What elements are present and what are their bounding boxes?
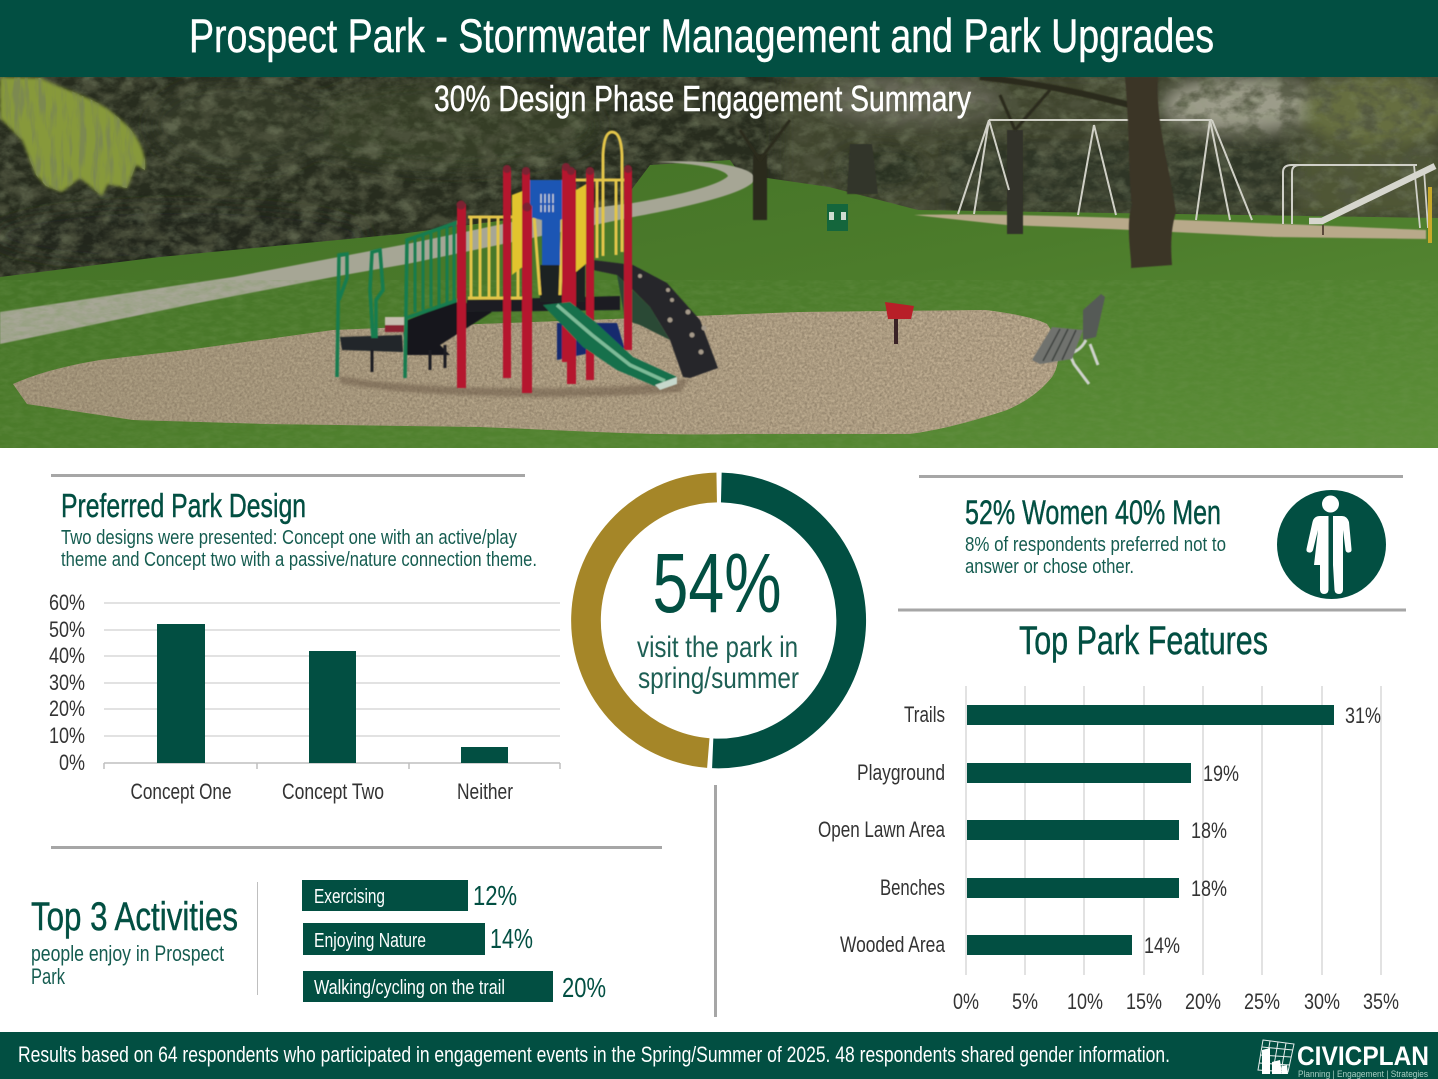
bar chart: park features: Benches (880, 875, 945, 900)
bar chart: park features: 30% (1304, 989, 1340, 1014)
subtitle: 30% Design Phase Engagement Summary (434, 78, 971, 119)
bar chart: park features: Open Lawn Area (818, 817, 946, 842)
icon: play structure (337, 132, 718, 393)
bar chart: park features: 10% (1067, 989, 1103, 1014)
panel: gender split (965, 490, 1386, 599)
footer note: Results based on 64 respondents who participated in engagement events in the Spring/Summer of 2025. 48 respondents shared gender information. (18, 1042, 1170, 1067)
icon: gender inclusive person (1277, 490, 1386, 599)
panel: preferred park design (49, 487, 560, 804)
bar: walking and cycling: Walking/cycling on the trail (314, 977, 505, 999)
bar: exercising (302, 880, 517, 911)
bar chart: preferred design: 60% (49, 590, 85, 615)
bar chart: preferred design: Concept One (130, 779, 232, 804)
bar chart: preferred design: Neither (457, 779, 513, 804)
panel: top 3 activities (31, 880, 606, 1003)
bar: exercising: 12% (473, 880, 517, 911)
text: activities note: Park (31, 964, 66, 989)
bar chart: preferred design: 0% (59, 750, 85, 775)
donut chart: 54% visit in spring/summer: spring/summer (638, 662, 799, 695)
bar chart: park features: 0% (953, 989, 979, 1014)
bar chart: park features: 14% (1144, 933, 1180, 958)
icon: red spring toy (885, 302, 914, 344)
bar chart: park features: 19% (1203, 761, 1239, 786)
bar chart: park features: 25% (1244, 989, 1280, 1014)
text: gender note (965, 534, 1226, 578)
text: gender note: 8% of respondents preferred not to (965, 534, 1226, 556)
bar chart: park features: Wooded Area (840, 932, 946, 957)
bar chart: park features (818, 686, 1399, 1014)
icon: silver slide (1283, 165, 1435, 243)
footer bar (0, 1032, 1438, 1079)
heading: gender percentages: 52% Women 40% Men (965, 494, 1221, 532)
bar chart: preferred design: 50% (49, 617, 85, 642)
bar: walking and cycling (303, 971, 606, 1003)
heading: preferred park design: Preferred Park Design (61, 487, 306, 524)
header banner (0, 0, 1438, 77)
heading: top park features: Top Park Features (1019, 619, 1268, 663)
donut chart: 54% visit in spring/summer: 54% (652, 536, 782, 630)
bar: walking and cycling: 20% (562, 972, 606, 1003)
bar chart: preferred design (49, 590, 560, 804)
bar chart: preferred design: 20% (49, 696, 85, 721)
bar chart: park features: Trails (904, 702, 945, 727)
willow tree (0, 77, 150, 197)
bar chart: preferred design: 10% (49, 723, 85, 748)
bar: exercising: Exercising (314, 886, 385, 908)
bar chart: park features: 31% (1345, 703, 1381, 728)
panel: top park features (818, 619, 1399, 1014)
bar chart: park features: 15% (1126, 989, 1162, 1014)
icon: swing sets (958, 120, 1252, 220)
bar chart: preferred design: Concept Two (282, 779, 384, 804)
donut chart: 54% visit in spring/summer: visit the park in (637, 631, 798, 664)
bar chart: park features: Playground (857, 760, 945, 785)
donut chart: 54% visit in spring/summer (586, 488, 851, 753)
text: gender note: answer or chose other. (965, 556, 1134, 578)
text: activities note: people enjoy in Prospect (31, 941, 224, 966)
heading: top 3 activities: Top 3 Activities (31, 895, 238, 939)
text: activities note (31, 941, 224, 989)
bar: enjoying nature: 14% (490, 923, 533, 954)
bar chart: park features: 18% (1191, 876, 1227, 901)
text: design description (61, 527, 537, 571)
bar: enjoying nature (303, 923, 533, 955)
logo: CivicPlan (1258, 1040, 1429, 1079)
icon: park bench (1032, 294, 1105, 384)
bar chart: preferred design: 30% (49, 670, 85, 695)
bar chart: park features: 5% (1012, 989, 1038, 1014)
text: design description: Two designs were presented: Concept one with an active/play (61, 527, 517, 549)
title: Prospect Park - Stormwater Management and Park Upgrades (189, 9, 1214, 62)
bar chart: park features: 35% (1363, 989, 1399, 1014)
bar: enjoying nature: Enjoying Nature (314, 930, 426, 952)
bar chart: park features: 20% (1185, 989, 1221, 1014)
photo: playground in Prospect Park (0, 70, 1438, 448)
bar chart: preferred design: 40% (49, 643, 85, 668)
text: design description: theme and Concept two with a passive/nature connection theme. (61, 549, 537, 571)
bar chart: park features: 18% (1191, 818, 1227, 843)
